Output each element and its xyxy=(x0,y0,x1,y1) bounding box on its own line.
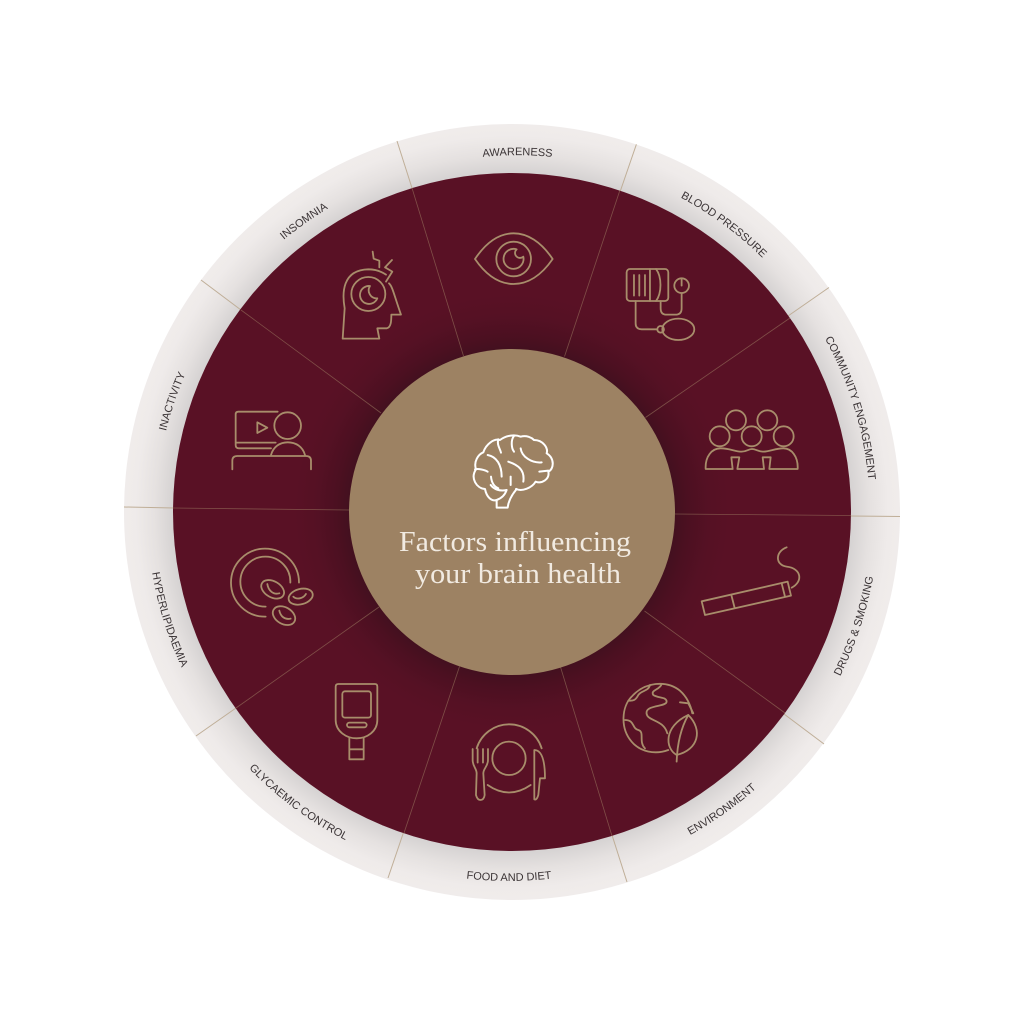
ring dividers xyxy=(124,141,900,882)
icon: glucose meter xyxy=(336,684,377,759)
label: community engagement: COMMUNITY ENGAGEMENT xyxy=(826,336,876,480)
icon: person watching screen xyxy=(232,412,311,469)
maroon disc xyxy=(173,173,851,851)
icon: eye xyxy=(475,233,553,284)
outer label ring xyxy=(124,124,900,900)
icon: plate and cutlery xyxy=(473,724,545,800)
label: environment: ENVIRONMENT xyxy=(687,782,754,835)
title: your brain health xyxy=(415,558,622,590)
icon: blood cells xyxy=(231,549,315,629)
label: food and diet: FOOD AND DIET xyxy=(467,871,551,881)
icon: globe and leaf xyxy=(623,684,697,762)
label: inactivity: INACTIVITY xyxy=(158,371,184,430)
title xyxy=(399,526,631,590)
label: glycaemic control: GLYCAEMIC CONTROL xyxy=(250,764,346,840)
label: blood pressure: BLOOD PRESSURE xyxy=(681,191,768,258)
label: hyperlipidaemia: HYPERLIPIDAEMIA xyxy=(152,572,188,668)
label: drugs and smoking: DRUGS & SMOKING xyxy=(834,576,873,676)
icon: blood pressure monitor xyxy=(627,269,694,340)
icon: cigarette xyxy=(702,547,799,615)
label: awareness: AWARENESS xyxy=(482,148,552,157)
icon: community group xyxy=(706,410,798,469)
segment dividers xyxy=(173,188,851,836)
icon: brain xyxy=(474,435,553,508)
label: insomnia: INSOMNIA xyxy=(280,204,328,240)
centre circle xyxy=(349,349,675,675)
title: Factors influencing xyxy=(399,526,631,558)
icon: insomnia head xyxy=(343,252,401,339)
